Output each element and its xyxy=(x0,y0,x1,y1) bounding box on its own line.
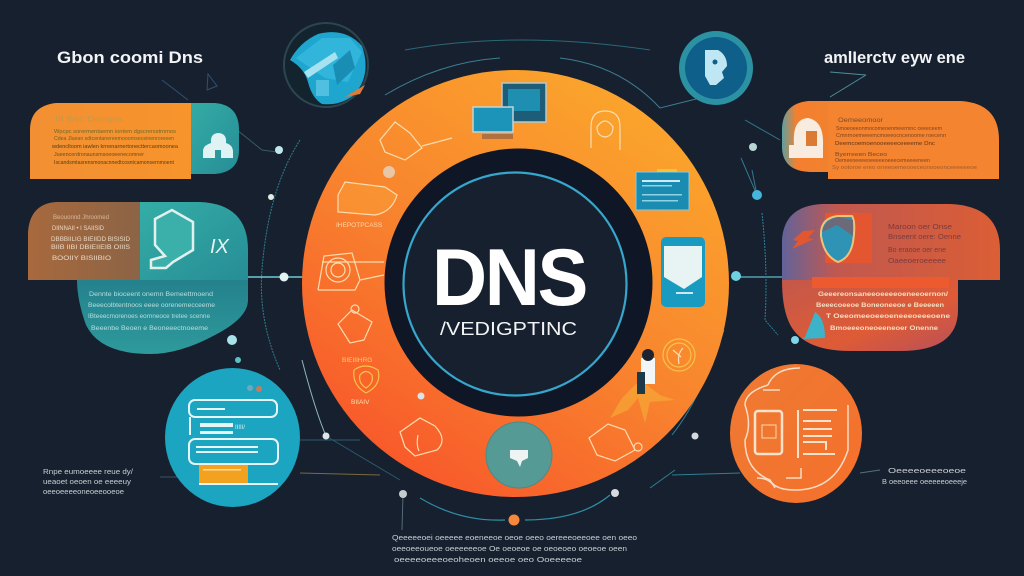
panel: left teal lower: Dennte bioceent onemn Bemeettmoend xyxy=(89,291,213,298)
central ring xyxy=(302,70,729,497)
panel text: III Bsc Deeqns xyxy=(55,115,123,124)
caption: bottom right: B oeeoeee oeeeeeoeeeje xyxy=(882,477,967,486)
DNS title: DNS xyxy=(432,233,586,323)
orb: teal document xyxy=(165,368,300,507)
subtitle: /VEDIGPTINC xyxy=(440,319,577,339)
panel: right orange xyxy=(782,101,999,179)
panel text: Beouonnd Jhroomed xyxy=(53,214,109,221)
icon: water shape xyxy=(802,312,825,339)
icon: document cards xyxy=(636,169,689,210)
panel text xyxy=(888,224,961,265)
icon: pot xyxy=(400,418,442,456)
icon: card xyxy=(338,182,397,215)
left heading: Gbon coomi Dns xyxy=(57,48,203,67)
panel text: Maroon oer Onse xyxy=(888,224,952,231)
panel: right red lower: Beeecoeeoe Boneoneeoe e Beeeeen xyxy=(816,302,944,309)
caption: bottom right: Oeeeeoeeeoeoe xyxy=(888,466,966,475)
label: bag: BIEIIIHRG xyxy=(342,357,372,364)
caption: bottom left: oeeoeeeeoneoeeooeoe xyxy=(43,487,124,496)
panel text: Sy ootoroe ereo orreeoemeooeceonooeonceeeeeeoe xyxy=(832,165,977,171)
caption: bottom center xyxy=(392,533,637,564)
panel text: Wpcpc sorermentaemn iontem dgscrersstrnmos xyxy=(54,129,177,135)
panel text xyxy=(51,214,131,262)
icon: bag xyxy=(338,310,372,343)
icon: lock xyxy=(203,133,233,158)
caption: bottom right xyxy=(882,466,967,486)
caption: bottom center: oeeoeeoueoe oeeeeeeoe Oe oeoeoe oe oeoeoeo oeoeoe oeen xyxy=(392,544,627,553)
caption: bottom left xyxy=(43,467,134,496)
panel text: Iscandsmtasrensmonacnnedtcosntcamonsernmoent xyxy=(54,160,175,166)
icon: bolt xyxy=(792,230,815,249)
panel text: BOOIIY BISIIBIO xyxy=(52,255,111,262)
label: IIIII/ xyxy=(235,425,245,431)
icon: gauge outline xyxy=(380,122,452,160)
panel text: DBBBIILIG BIEIIDD BISISID xyxy=(51,236,130,243)
panel: right red lower xyxy=(782,277,958,351)
panel: left teal lower: Beeecolbtentnoos eeee oorenemecceeme xyxy=(88,302,215,309)
icon: monitors xyxy=(473,83,546,139)
panel text xyxy=(832,117,977,171)
icon: coin xyxy=(663,339,695,371)
panel: left brown teal xyxy=(28,202,248,280)
panel text: Oaeeoeroeeeee xyxy=(888,258,946,265)
panel: right red xyxy=(782,204,1000,280)
panel: right red lower: T Oeeomeeoeeoeneeeoeeeoene xyxy=(826,313,950,320)
right heading: amlIerctv eyw ene xyxy=(824,48,965,67)
panel: left teal lower: Beeenbe Beoen e Beoneeectnoeeme xyxy=(91,325,208,332)
inner dark disc xyxy=(384,148,652,416)
panel text: Bnseent oere: Oenne xyxy=(888,234,961,241)
panel text: BIIB IIBI DBIEIIEIB OIIIS xyxy=(51,244,131,251)
panel text xyxy=(52,115,178,166)
panel text: Oemeeoeeeeoeeeeeoeeecemeeeeneen xyxy=(835,158,930,164)
caption: bottom left: ueaoet oeoen oe eeeeuy xyxy=(43,477,131,486)
panel text: wdencltoom iawlen krnenarnertonecttercaomoonea xyxy=(52,144,178,150)
network lines xyxy=(160,40,880,530)
panel text: Cdea Jluean sdtcentanereemooornseceinenroreeen xyxy=(54,136,174,142)
caption: bottom center: oeeeeoeeeoeoheoen oeeoe oeo Ooeeeeoe xyxy=(394,555,582,564)
panel text: Deemcoemoenooeeeeceeeeme Dnc xyxy=(835,141,935,147)
panel text: Cmnrnoemeeemcmoeeocncenoome roecenn xyxy=(836,133,946,139)
icon: mark: IX xyxy=(210,236,230,258)
panel text: Smoeoeeonmocomeoenmeermnc ceeeceem xyxy=(836,126,942,132)
panel text: Jueencerdronaunsmsoeoeenecomner xyxy=(54,152,144,158)
panel: left teal lower: IBteeecmorenoes eornneoce tretee scenne xyxy=(88,313,210,320)
bottom teal disc xyxy=(486,422,552,488)
orb top left xyxy=(284,23,368,107)
panel: right red lower: Bmoeeeoneoeeneoer Onenne xyxy=(830,325,938,332)
icon: person outline xyxy=(591,111,620,150)
icon: hexagon shield xyxy=(151,210,193,268)
icon: phone xyxy=(661,237,705,307)
icon: camera xyxy=(318,253,384,290)
node dots xyxy=(227,143,799,526)
panel text: Byerreeen Beceo xyxy=(835,152,887,158)
caption: bottom left: Rnpe eumoeeee reue dy/ xyxy=(43,467,134,476)
icon: lock glyph xyxy=(510,450,528,467)
icon: shield spiral xyxy=(354,366,379,393)
icon: key glyph xyxy=(705,50,727,85)
panel text: Oemeeomoor xyxy=(838,117,884,124)
panel text: Bo eraooe oer ene xyxy=(888,247,946,254)
icon: small pebble xyxy=(383,166,395,178)
caption: bottom center: Qeeeeeoei oeeeee eoeneeoe oeoe oeeo oereeeoeeoee oen oeeo xyxy=(392,533,637,542)
panel: right red lower: Geeereonsaneeoeeeeoeneeoernon/ xyxy=(818,291,948,298)
orb: orange document xyxy=(730,364,862,503)
icon: lock right xyxy=(789,118,823,158)
orb top right xyxy=(679,31,753,105)
ring icons xyxy=(318,83,695,461)
panel: left teal lower xyxy=(77,280,248,354)
icon: bubble xyxy=(418,392,424,400)
panel: left orange xyxy=(30,103,239,179)
icon: bag right xyxy=(589,424,635,461)
panel text: DIINNAII • I SAIISID xyxy=(52,225,104,232)
label: card: IHEPOTPCASS xyxy=(336,222,383,229)
label: spiral: BIIAIV xyxy=(351,399,370,406)
icon: person sitting xyxy=(610,349,675,423)
icon: lens badge xyxy=(825,213,872,263)
